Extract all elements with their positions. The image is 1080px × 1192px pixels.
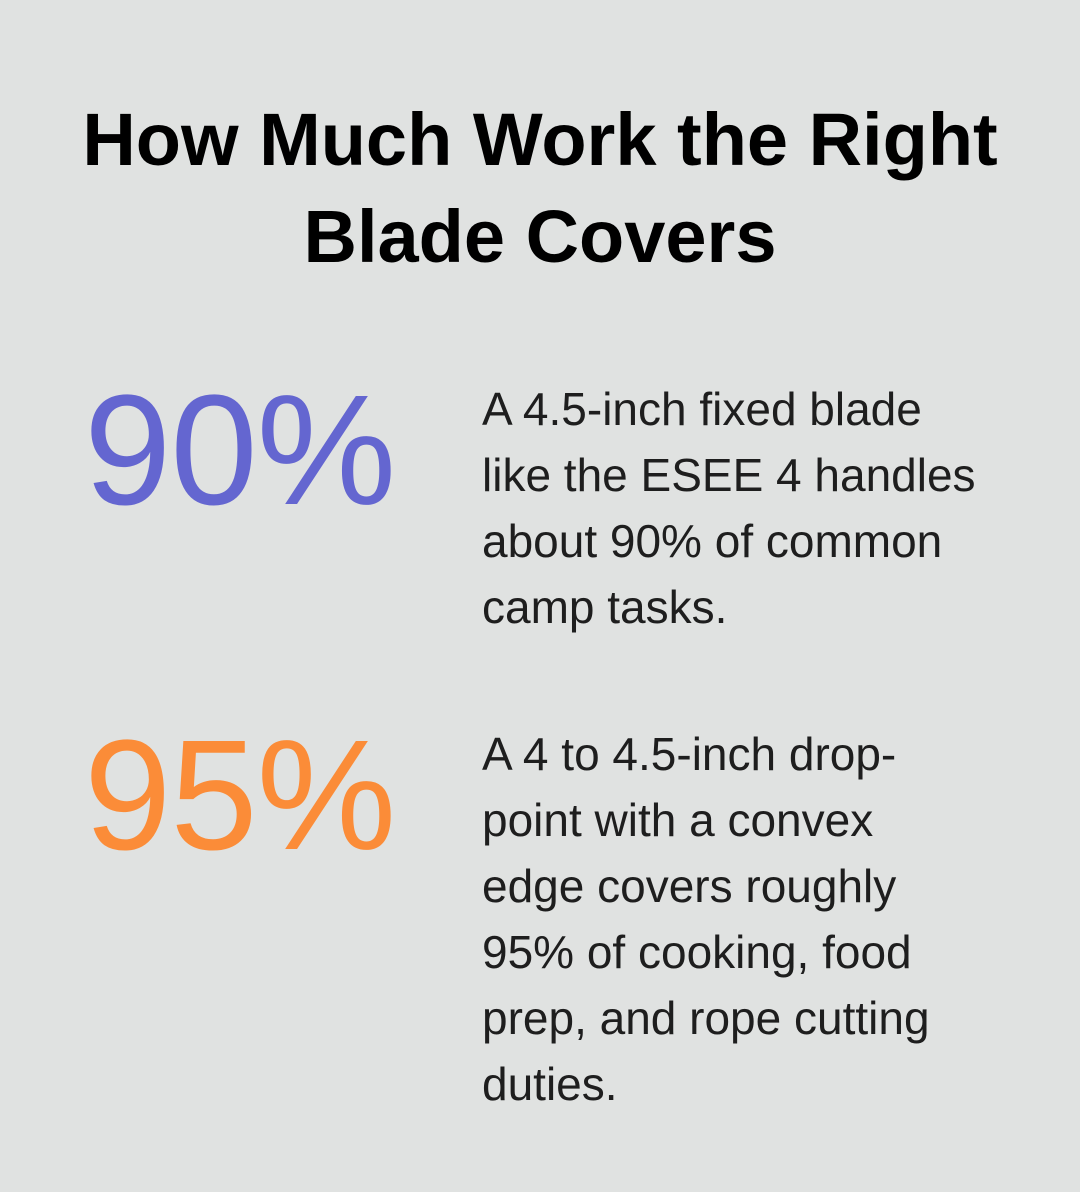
- stat text: 95% description: point with a convex: [482, 794, 873, 846]
- stat number: 95%: 95%: [84, 708, 395, 883]
- title: Blade Covers: [304, 195, 776, 278]
- stat text: 95% description: [482, 728, 930, 1110]
- stat text: 90% description: [482, 383, 976, 633]
- title: [82, 98, 998, 278]
- stat text: 95% description: 95% of cooking, food: [482, 926, 912, 978]
- stat text: 90% description: A 4.5-inch fixed blade: [482, 383, 922, 435]
- title: How Much Work the Right: [82, 98, 998, 181]
- stat number: 90%: 90%: [84, 363, 395, 538]
- stat text: 95% description: prep, and rope cutting: [482, 992, 930, 1044]
- stat text: 90% description: like the ESEE 4 handles: [482, 449, 976, 501]
- stat text: 95% description: duties.: [482, 1058, 618, 1110]
- stat text: 95% description: A 4 to 4.5-inch drop-: [482, 728, 896, 780]
- stat text: 90% description: about 90% of common: [482, 515, 942, 567]
- stat text: 95% description: edge covers roughly: [482, 860, 896, 912]
- stat text: 90% description: camp tasks.: [482, 581, 727, 633]
